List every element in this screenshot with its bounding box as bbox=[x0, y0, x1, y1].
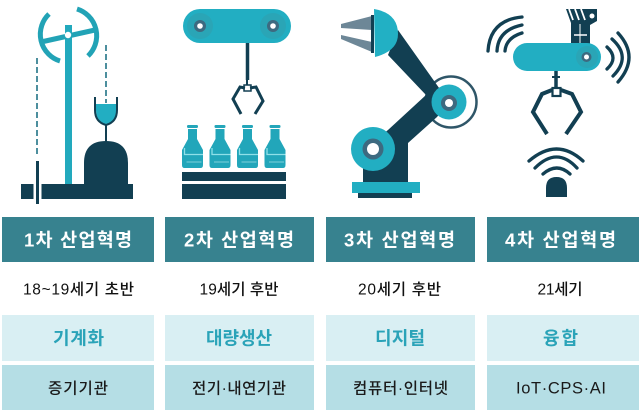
heading: fourth revolution bbox=[487, 217, 639, 262]
technology: first revolution bbox=[2, 365, 154, 410]
technology: first revolution: 증기기관 bbox=[48, 380, 108, 398]
heading: first revolution bbox=[2, 217, 154, 262]
heading: third revolution bbox=[326, 217, 475, 262]
keyword: fourth revolution bbox=[487, 315, 639, 361]
technology: fourth revolution: IoT·CPS·AI bbox=[516, 380, 606, 398]
icon: fourth revolution connected gripper bbox=[488, 9, 629, 197]
period: third revolution: 20세기 후반 bbox=[358, 280, 441, 298]
panel: first revolution bbox=[2, 217, 154, 410]
keyword: third revolution: 디지털 bbox=[375, 328, 425, 348]
keyword: fourth revolution: 융합 bbox=[543, 328, 578, 348]
panel: second revolution bbox=[165, 217, 314, 410]
icon: second revolution assembly line bbox=[182, 9, 291, 199]
keyword: third revolution bbox=[326, 315, 475, 361]
keyword: second revolution bbox=[165, 315, 314, 361]
panel: fourth revolution bbox=[487, 217, 639, 410]
heading: first revolution: 1차 산업혁명 bbox=[24, 230, 132, 250]
panel: third revolution bbox=[326, 217, 475, 410]
heading: second revolution bbox=[165, 217, 314, 262]
technology: fourth revolution bbox=[487, 365, 639, 410]
heading: fourth revolution: 4차 산업혁명 bbox=[505, 230, 616, 250]
period: second revolution: 19세기 후반 bbox=[200, 280, 278, 298]
technology: third revolution bbox=[326, 365, 475, 410]
icon: first revolution steam engine bbox=[21, 9, 133, 204]
technology: second revolution bbox=[165, 365, 314, 410]
period: fourth revolution: 21세기 bbox=[538, 280, 582, 298]
keyword: second revolution: 대량생산 bbox=[206, 328, 272, 348]
keyword: first revolution: 기계화 bbox=[53, 328, 104, 348]
technology: second revolution: 전기·내연기관 bbox=[192, 380, 286, 398]
period: first revolution: 18~19세기 초반 bbox=[23, 280, 134, 298]
heading: third revolution: 3차 산업혁명 bbox=[344, 230, 455, 250]
icon: third revolution robot arm bbox=[341, 9, 476, 198]
heading: second revolution: 2차 산업혁명 bbox=[184, 230, 294, 250]
technology: third revolution: 컴퓨터·인터넷 bbox=[353, 380, 448, 398]
keyword: first revolution bbox=[2, 315, 154, 361]
